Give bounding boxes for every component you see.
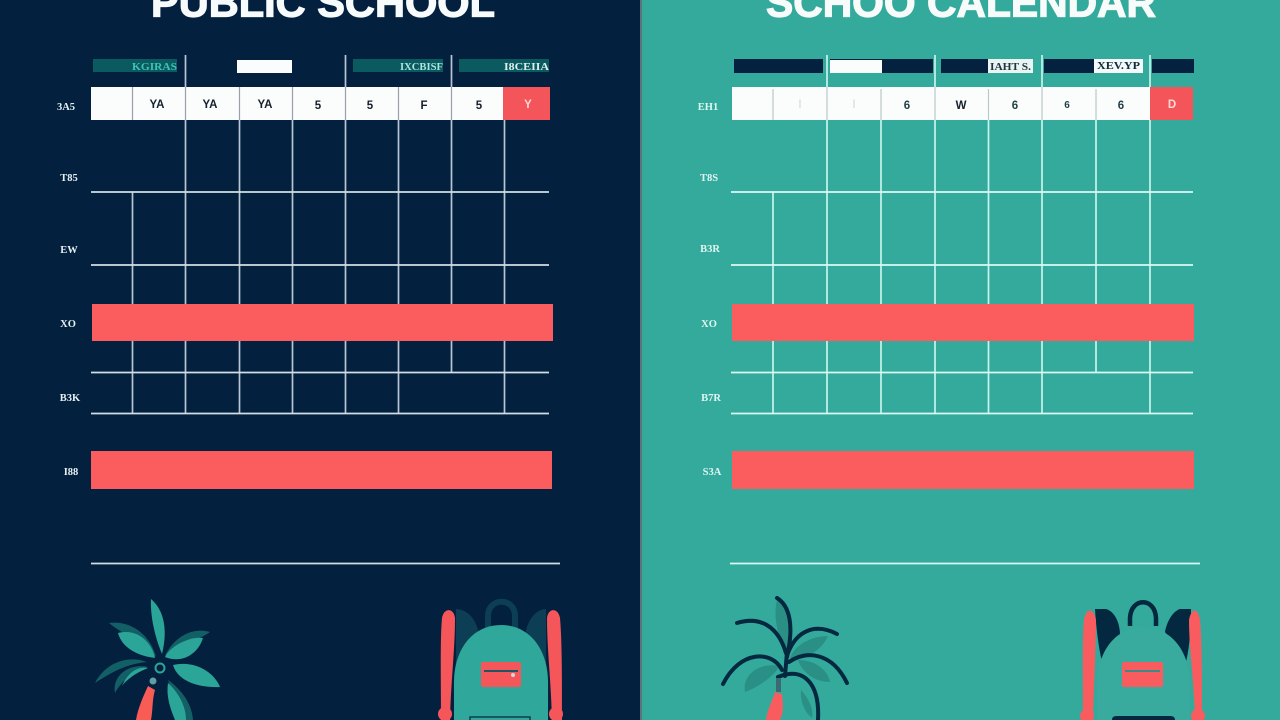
row labels: XO [701,319,717,330]
day row: 6 [1118,100,1124,112]
month header strip: IAHT S. [990,61,1031,73]
row labels: XO [60,319,76,330]
day row: F [420,100,428,112]
month header strip: IXCBISF [400,61,443,73]
row labels: I88 [64,467,78,478]
holiday bar 1 [732,304,1194,341]
panel: public school (navy) [0,0,640,720]
calendar grid lines [730,55,1200,564]
day row: YA [258,99,272,111]
day row: YA [150,99,164,111]
day row: Y [524,99,532,111]
day row: I [852,99,856,111]
day row: W [956,100,967,112]
icon: palm tree [95,599,220,720]
month header strip: KGIRAS [132,61,177,73]
row labels: EH1 [698,102,718,113]
row labels: B3K [60,393,81,404]
day row: 5 [367,100,374,112]
day row: 5 [476,100,483,112]
icon: palm tree [723,598,847,720]
day row: D [1168,99,1176,111]
day row [91,87,550,120]
day row: 6 [1012,100,1018,112]
day row: I [798,99,802,111]
day row [732,87,1193,120]
row labels: EW [60,245,78,256]
month header strip [734,59,1194,73]
holiday bar 2 [732,451,1194,489]
calendar grid lines [91,55,560,564]
holiday bar 2 [91,451,552,489]
icon: backpack [438,602,563,720]
row labels [57,102,81,478]
day row: 6 [1064,100,1070,111]
panel: school calendar (teal) [640,0,1280,720]
row labels: T85 [60,173,78,184]
day row: 6 [904,100,910,112]
row labels [698,102,722,478]
day row: 5 [315,100,322,112]
row labels: T8S [700,173,718,184]
row labels: S3A [703,467,722,478]
month header strip: XEV.YP [1097,60,1140,72]
icon: backpack [1080,602,1205,720]
month header strip [93,59,549,73]
holiday bar 1 [92,304,553,341]
month header strip: I8CEIIA [504,61,549,73]
row labels: B3R [700,244,720,255]
row labels: 3A5 [57,102,75,113]
day row: YA [203,99,217,111]
row labels: B7R [701,393,721,404]
